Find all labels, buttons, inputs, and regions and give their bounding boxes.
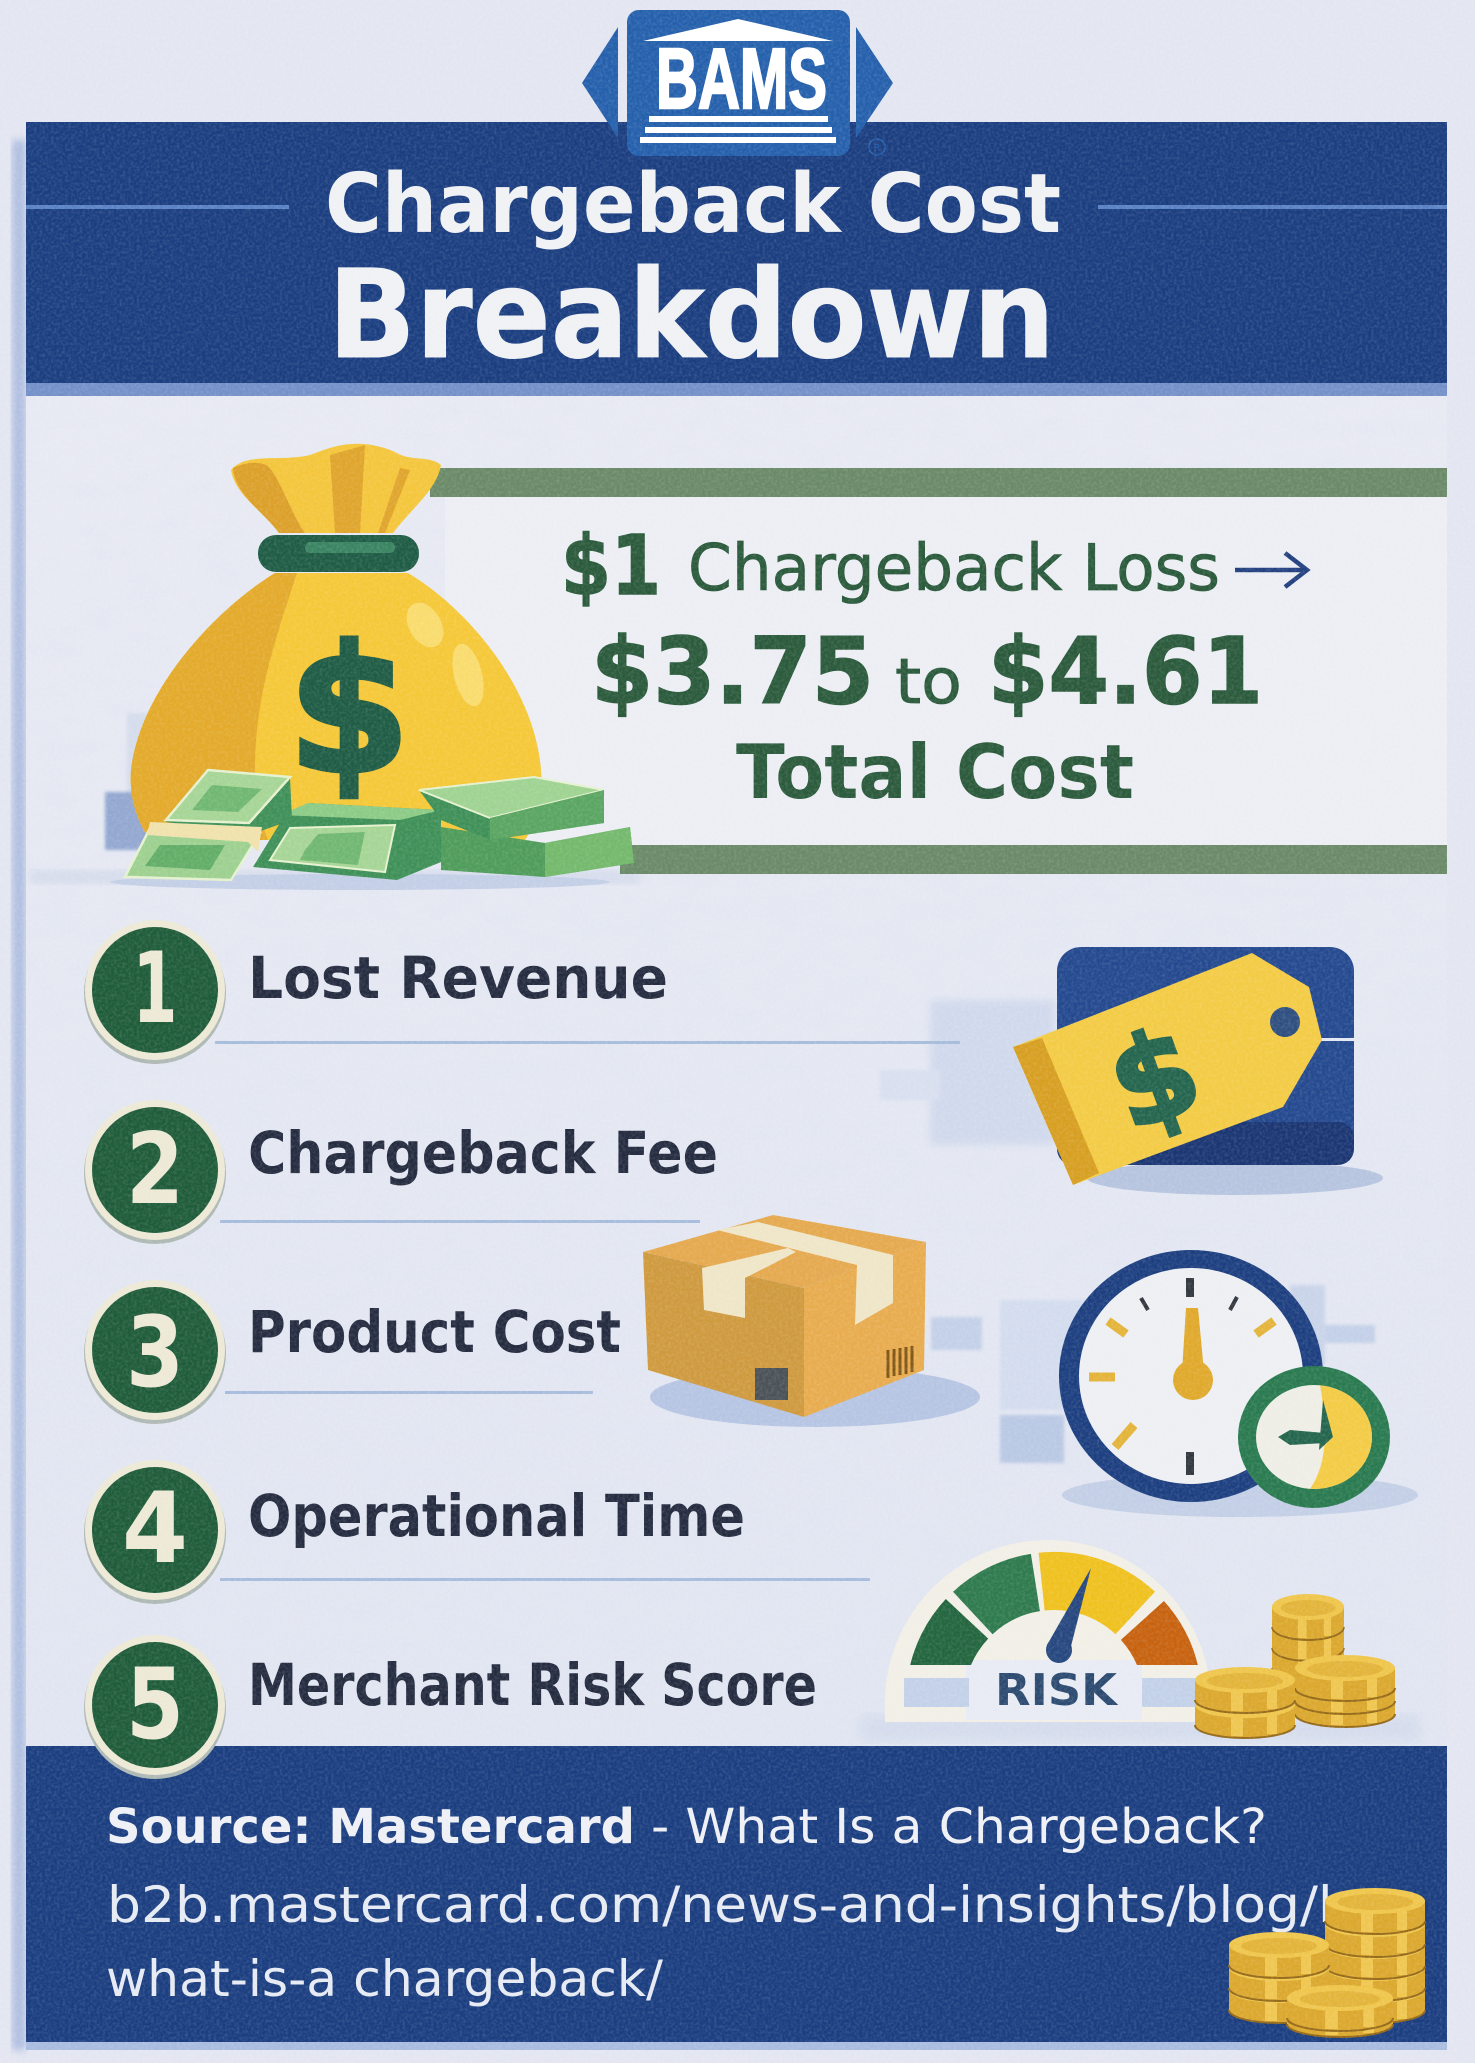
text: cost range: to: [895, 645, 962, 718]
text: cost range: $4.61: [988, 618, 1263, 725]
decorative shadow blocks: [30, 713, 1420, 1741]
arrow: [1235, 553, 1307, 587]
source line: [106, 1799, 1267, 1855]
BAMS logo: BAMS: [656, 32, 827, 127]
icon: footer coin stacks: [1229, 1888, 1425, 2037]
source line: - What Is a Chargeback?: [651, 1799, 1267, 1855]
item 3: product cost: 3: [126, 1296, 184, 1410]
icon: price tag: $: [1092, 1000, 1218, 1159]
text: total cost: Total Cost: [736, 728, 1134, 816]
small clock: [1238, 1366, 1390, 1508]
header banner: [26, 122, 1447, 396]
text: cost range: [591, 618, 1263, 725]
item 4: operational time: Operational Time: [248, 1482, 745, 1550]
icon: money bag: [131, 444, 542, 840]
title line 2: Breakdown: [328, 244, 1055, 386]
item 2: chargeback fee: 2: [126, 1113, 184, 1227]
item 5: merchant risk score: [84, 1635, 817, 1779]
item 1: lost revenue: [84, 920, 668, 1064]
BAMS logo: [582, 10, 893, 156]
icon: risk gauge: [885, 1540, 1211, 1722]
item 3: product cost: [84, 1280, 621, 1424]
url line 1: b2b.mastercard.com/news-and-insights/blog/b: [107, 1876, 1352, 1934]
item 1: lost revenue: Lost Revenue: [248, 944, 668, 1012]
text: $1 chargeback loss: Chargeback Loss: [688, 532, 1220, 606]
url line 2: what-is-a chargeback/: [106, 1950, 663, 2008]
panel: total cost callout: [430, 468, 1447, 874]
item 5: merchant risk score: 5: [126, 1648, 184, 1762]
item 3: product cost: Product Cost: [248, 1298, 621, 1366]
text: $1 chargeback loss: [561, 519, 1220, 614]
item 2: chargeback fee: [84, 1100, 718, 1244]
item 4: operational time: [84, 1460, 745, 1604]
source line: Source: Mastercard: [106, 1799, 635, 1855]
icon: cash bundles: [110, 770, 634, 890]
BAMS logo: R: [874, 143, 881, 154]
item 1: lost revenue: 1: [132, 932, 178, 1046]
item 4: operational time: 4: [122, 1472, 188, 1586]
icon: price tag: [1013, 947, 1383, 1195]
icon: risk gauge: RISK: [995, 1665, 1119, 1716]
item 2: chargeback fee: Chargeback Fee: [248, 1119, 718, 1187]
icon: money bag: $: [288, 610, 410, 813]
item 5: merchant risk score: Merchant Risk Score: [248, 1651, 817, 1719]
numbered list: [84, 920, 960, 1604]
title line 1: Chargeback Cost: [325, 157, 1061, 252]
icon: coin stacks: [1195, 1594, 1395, 1738]
text: $1 chargeback loss: $1: [561, 519, 661, 614]
panel: source footer: [26, 1746, 1447, 2042]
icon: cardboard box: [643, 1215, 980, 1427]
divider lines: [215, 1041, 960, 1581]
icon: clock: [1059, 1250, 1418, 1517]
text: cost range: $3.75: [591, 618, 874, 725]
